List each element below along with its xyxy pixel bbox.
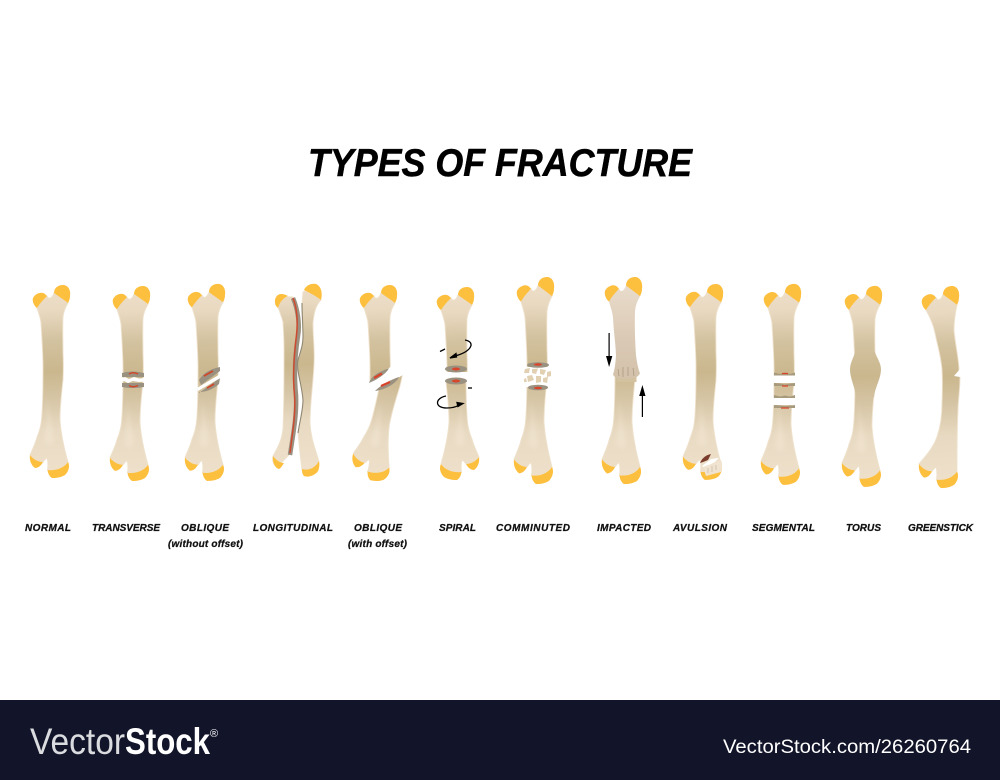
right half [298, 284, 322, 477]
labels: LONGITUDINAL [253, 523, 333, 534]
impacted upper fragment [602, 277, 642, 484]
bone: oblique with offset [352, 285, 403, 481]
bone: spiral fracture [434, 287, 479, 480]
labels: SEGMENTAL [752, 523, 815, 534]
labels: GREENSTICK [908, 523, 974, 534]
logo: VectorStock: Vector [30, 721, 125, 762]
fragment ends [445, 366, 467, 384]
bone: greenstick fracture [919, 286, 966, 488]
logo: VectorStock: ® [210, 728, 218, 740]
bone: longitudinal fracture [273, 284, 322, 477]
bone: normal [30, 285, 70, 478]
image id: VectorStock.com/26260764 [723, 737, 971, 758]
longitudinal crack [290, 298, 299, 455]
labels: NORMAL [25, 523, 71, 534]
segment gaps [768, 372, 800, 408]
labels: TRANSVERSE [92, 523, 160, 534]
footer bar [0, 700, 1000, 780]
fracture ends [369, 368, 399, 391]
bone: transverse fracture [110, 286, 150, 481]
bone: avulsion fracture [683, 284, 723, 480]
greenstick notch [954, 369, 966, 378]
arrows: compression [606, 333, 646, 417]
left half [273, 294, 298, 469]
fracture gap [120, 372, 146, 388]
labels: (with offset) [348, 539, 408, 550]
bone: comminuted fracture [514, 277, 556, 484]
labels: AVULSION [672, 523, 728, 534]
bone: torus fracture [842, 286, 882, 487]
bone: oblique without offset [185, 284, 225, 481]
labels: COMMINUTED [496, 523, 570, 534]
bone: segmental fracture [761, 284, 801, 485]
title: TYPES OF FRACTURE [308, 142, 693, 185]
avulsed fragment [700, 454, 722, 476]
labels: SPIRAL [439, 523, 476, 534]
labels: OBLIQUE [354, 523, 402, 534]
shattered fragments [520, 362, 556, 390]
logo: VectorStock: Stock [125, 721, 210, 762]
torus bulge [850, 348, 881, 397]
labels [25, 523, 974, 550]
bone: impacted fracture [602, 277, 646, 484]
labels: OBLIQUE [181, 523, 229, 534]
arrows: rotation [438, 340, 472, 408]
labels: (without offset) [168, 539, 244, 550]
logo: VectorStock [30, 721, 218, 762]
oblique fracture gap [197, 367, 222, 393]
labels: IMPACTED [597, 523, 651, 534]
labels: TORUS [846, 523, 881, 534]
